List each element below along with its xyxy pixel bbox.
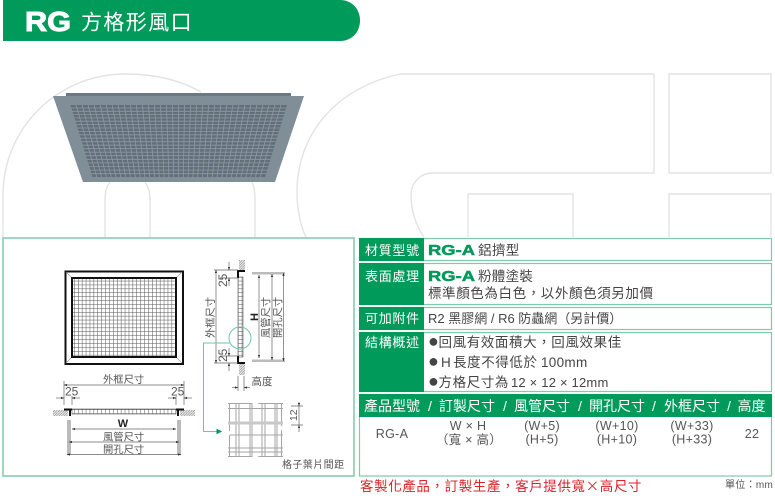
table data row: (W+5) — [524, 419, 560, 433]
table header: 開孔尺寸 — [589, 398, 645, 414]
width section drawing: 風管尺寸 — [103, 430, 144, 444]
row: material: 材質型號 — [365, 243, 420, 258]
row: surface treatment: 標準顏色為白色，以外顏色須另加價 — [428, 285, 654, 301]
table data row: (H+33) — [672, 432, 712, 446]
table data row: (H+10) — [597, 432, 637, 446]
table header — [359, 394, 772, 417]
width section drawing — [53, 373, 195, 456]
width section drawing: 25 — [65, 384, 79, 398]
background outline lettering — [3, 74, 771, 237]
table data row: (H+5) — [525, 432, 559, 446]
height section drawing: 開孔尺寸 — [272, 297, 284, 338]
unit note: 單位：mm — [725, 478, 773, 491]
height section drawing: 風管尺寸 — [260, 297, 272, 338]
height section drawing: 25 — [216, 273, 230, 287]
row: structure overview: 100mm — [541, 355, 588, 370]
panel: dimension drawings — [3, 238, 354, 476]
table header: / — [727, 398, 731, 414]
specification table — [359, 394, 772, 476]
row: accessories: 可加附件 — [365, 311, 420, 326]
table header: 風管尺寸 — [514, 398, 570, 414]
row: structure overview: ● — [428, 371, 439, 391]
table data row: (W+33) — [670, 419, 714, 433]
height section drawing — [204, 260, 285, 391]
width section drawing: 25 — [171, 384, 185, 398]
row: structure overview: H — [441, 355, 451, 370]
title name: 方格形風口 — [81, 12, 193, 34]
table data row: （寬 × 高） — [436, 432, 502, 447]
table data row: (W+10) — [595, 419, 639, 433]
label: height: 高度 — [252, 375, 273, 388]
row: surface treatment: RG-A — [428, 268, 475, 285]
label: W: W — [118, 418, 129, 430]
table header: / — [428, 398, 432, 414]
detail callout circle and leader arrow — [204, 327, 251, 434]
row: surface treatment: 表面處理 — [365, 269, 420, 284]
table data row: RG-A — [376, 427, 409, 441]
grid blade detail — [227, 402, 344, 471]
table header: / — [578, 398, 582, 414]
product image: square grille — [53, 93, 304, 182]
width section drawing: 開孔尺寸 — [103, 443, 144, 456]
row: structure overview: 結構概述 — [365, 335, 420, 350]
table header: 訂製尺寸 — [439, 398, 495, 414]
row: structure overview: 方格尺寸為 — [438, 375, 509, 390]
table header: / — [652, 398, 656, 414]
note: custom made: 客製化產品，訂製生產，客戶提供寬×高尺寸 — [360, 475, 642, 495]
table data row: W × H — [450, 419, 486, 433]
row: material — [359, 238, 772, 261]
row: structure overview: ● — [428, 331, 439, 351]
row: structure overview: ● — [428, 351, 439, 371]
title code: RG — [25, 6, 71, 37]
row: surface treatment: 粉體塗裝 — [478, 268, 533, 284]
blade spacing dimension: 12 — [289, 409, 300, 421]
table data row — [376, 419, 759, 447]
table header: 外框尺寸 — [664, 398, 720, 414]
row: material: RG-A — [428, 242, 475, 259]
height section drawing: 外框尺寸 — [204, 297, 217, 338]
label: blade spacing: 格子葉片間距 — [282, 458, 344, 471]
row: structure overview: 長度不得低於 — [453, 354, 538, 370]
front view of grille — [66, 272, 183, 364]
row: surface treatment — [359, 263, 772, 305]
row: structure overview: 回風有效面積大，回風效果佳 — [438, 335, 622, 350]
table header: 產品型號 — [364, 398, 420, 414]
row: accessories — [359, 307, 772, 330]
label: outer frame size: 外框尺寸 — [103, 373, 144, 386]
row: structure overview — [359, 331, 772, 392]
row: structure overview: 12 × 12 × 12mm — [511, 375, 608, 390]
row: accessories: R2 黑膠網 / R6 防蟲網（另計價） — [428, 311, 622, 326]
title banner — [3, 0, 360, 41]
height section drawing: H — [249, 313, 261, 321]
table data row: 22 — [745, 427, 759, 441]
table header: / — [503, 398, 507, 414]
row: material: 鋁擠型 — [478, 243, 520, 258]
height section drawing: 25 — [216, 348, 230, 362]
table header: 高度 — [738, 398, 766, 414]
